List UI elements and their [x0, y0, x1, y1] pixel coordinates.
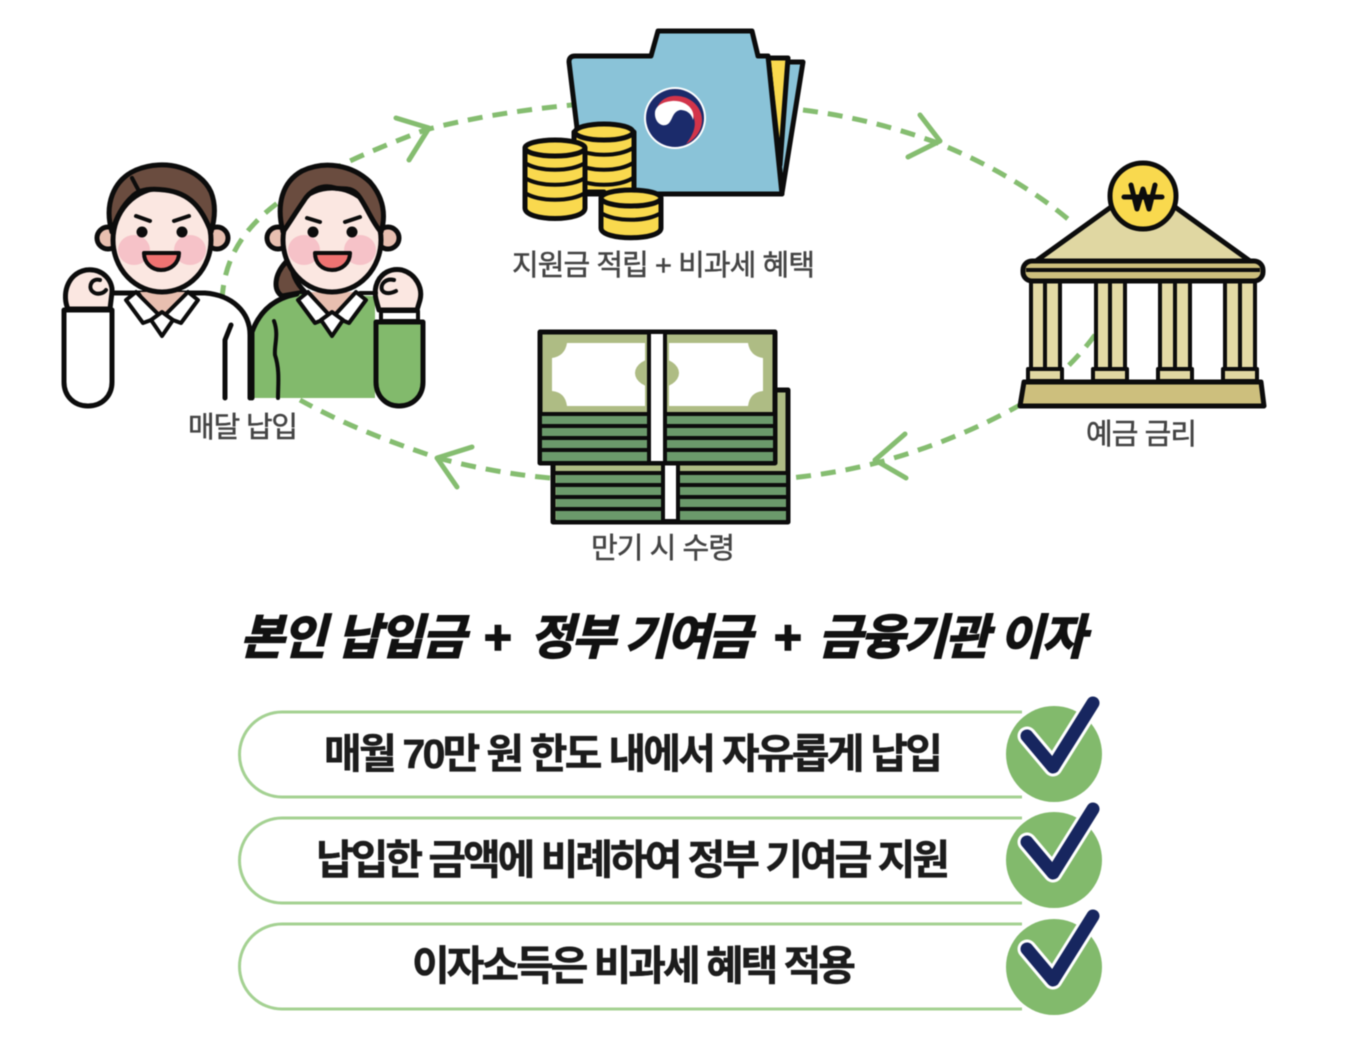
back paper blue [770, 62, 803, 193]
title: + [773, 612, 801, 665]
list item 2 [240, 809, 1102, 908]
man ears [97, 227, 119, 249]
man eyes and brows [136, 226, 148, 238]
lower bundle [553, 390, 788, 522]
label: received at maturity: 만기 시 수령 [591, 533, 735, 565]
woman hair [280, 165, 383, 232]
label: subsidy: 지원금 적립 + 비과세 혜택 [512, 249, 815, 282]
columns [1031, 281, 1255, 369]
list item 3 [240, 916, 1102, 1015]
cycle arrows: dashed loop [222, 105, 1095, 487]
won coin [1110, 163, 1176, 229]
icon: woman [252, 165, 423, 406]
back paper yellow [768, 58, 788, 165]
woman ponytail [276, 262, 305, 296]
man hair [109, 165, 214, 232]
coin stack back [574, 124, 634, 205]
icon: man [64, 165, 250, 406]
folder [569, 31, 782, 194]
upper bundle [540, 332, 775, 463]
coin stack front [601, 190, 661, 238]
woman sweater [252, 294, 375, 398]
man neck and collar [140, 292, 185, 326]
label: deposit interest: 예금 금리 [1086, 419, 1197, 451]
man face [113, 188, 211, 292]
list item 1 [240, 703, 1102, 802]
column bases [1028, 369, 1257, 381]
icon: government folder and coins [525, 31, 803, 238]
title [240, 612, 1092, 665]
woman neck and collar [310, 292, 355, 326]
woman fist [375, 270, 421, 310]
entablature [1023, 261, 1263, 281]
title: + [483, 612, 511, 665]
woman face [283, 188, 381, 292]
man body [113, 293, 250, 399]
title: 금융기관 이자 [818, 612, 1092, 665]
woman ears [267, 227, 289, 249]
check icon [1006, 916, 1102, 1015]
check icon [1006, 703, 1102, 802]
title: 정부 기여금 [530, 612, 756, 665]
text: 납입한 금액에 비례하여 정부 기여금 지원 [316, 837, 950, 883]
text: 매월 70만 원 한도 내에서 자유롭게 납입 [324, 731, 943, 777]
check icon [1006, 809, 1102, 908]
icon: bank [1020, 163, 1264, 406]
woman eyes and brows [308, 226, 318, 238]
man arm [64, 310, 112, 406]
label: monthly payment: 매달 납입 [188, 411, 298, 444]
man mouth [144, 253, 179, 270]
roof [1036, 184, 1250, 261]
text: 이자소득은 비과세 혜택 적용 [412, 943, 856, 989]
woman arm [376, 322, 423, 406]
government emblem [644, 87, 706, 149]
man fist [65, 270, 112, 309]
plinth [1020, 382, 1264, 406]
coin stack left [525, 140, 585, 218]
icon: cash bundles [540, 332, 788, 522]
woman mouth [315, 253, 350, 270]
title: 본인 납입금 [240, 612, 470, 665]
